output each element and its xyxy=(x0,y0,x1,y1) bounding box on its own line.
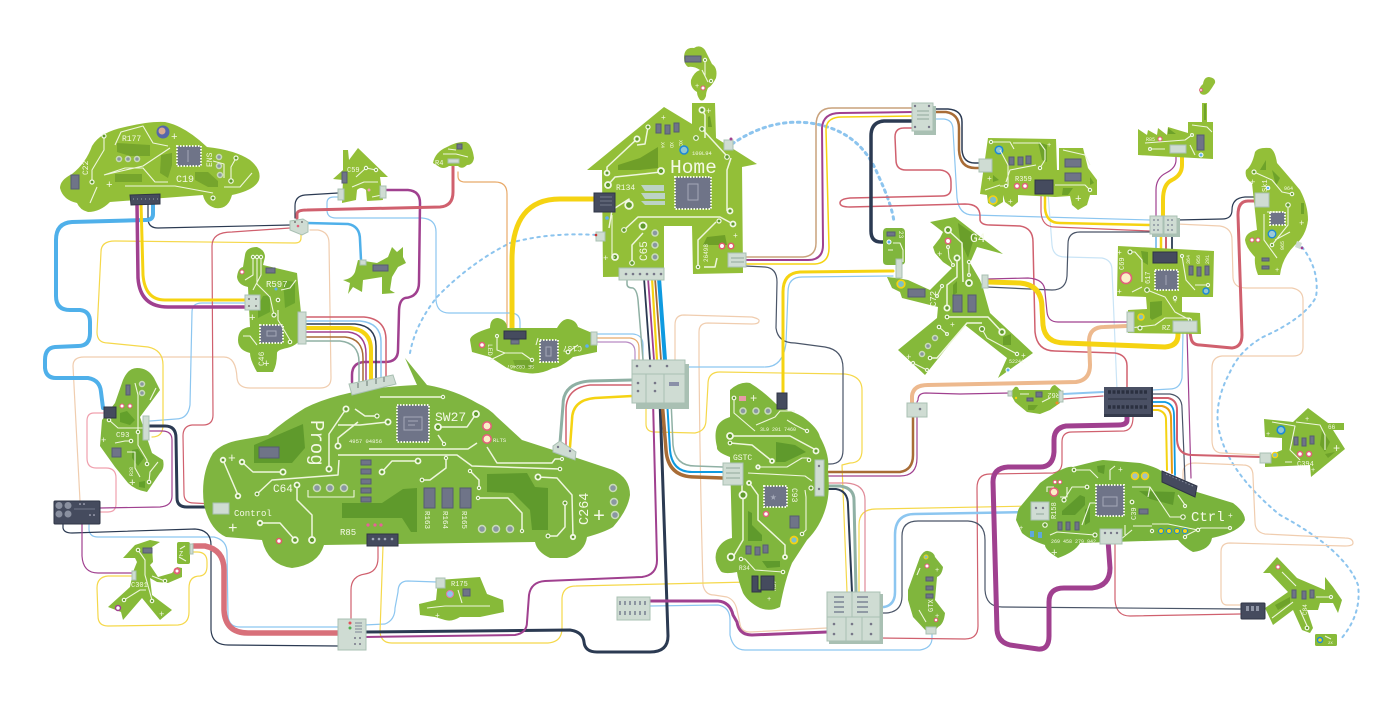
board: big car Prog: R164 xyxy=(440,511,448,530)
board: big car Prog: Control xyxy=(234,509,272,519)
board: walking man C301: + xyxy=(159,610,164,620)
board: walking man G4: 52241 xyxy=(1009,359,1024,365)
board: GSTC blob C93 xyxy=(716,383,829,610)
board: arrow C394: + xyxy=(1305,416,1309,424)
board: small car R175: R175 xyxy=(451,581,468,589)
board: R62 xyxy=(1010,385,1063,414)
board: small Z tag: Z xyxy=(179,551,183,559)
board: car C19: ENS xyxy=(206,152,215,167)
board: truck R359: + xyxy=(1075,194,1082,206)
board: car C19: R177 xyxy=(122,135,141,144)
connector: hub near C59 xyxy=(290,219,308,235)
board: house Home: + xyxy=(706,107,711,117)
board: car C19: + xyxy=(106,180,113,192)
board: GSTC blob C93: GSTC xyxy=(733,454,752,463)
board: house Home: XD xyxy=(668,142,674,148)
board: house Home: Home xyxy=(670,157,717,179)
connector: small right of Prog xyxy=(553,441,576,460)
smoke board: + xyxy=(695,83,699,91)
connector: top of big car xyxy=(349,375,396,395)
board: GSTC blob C93: + xyxy=(767,596,771,604)
hub module: bottom centre xyxy=(827,592,883,644)
board: plane man C84: C84 xyxy=(1302,604,1309,615)
board: C93 xyxy=(100,368,164,492)
board: factory xyxy=(1138,103,1213,159)
board: truck R359: + xyxy=(987,175,992,184)
board: walking man G4: + xyxy=(906,353,911,363)
hub module: lower left xyxy=(338,619,366,650)
board: house Home: + xyxy=(661,114,666,123)
board: LED car xyxy=(470,318,597,373)
board: GSTC blob C93: R34 xyxy=(739,565,750,572)
board: RZ module: 291 xyxy=(1205,255,1211,264)
board: big car Prog: SW27 xyxy=(435,410,466,425)
board: car C19: C19 xyxy=(176,175,194,186)
board: big car Prog: RLTS xyxy=(493,437,507,444)
board: car Sk1: + xyxy=(1275,267,1279,275)
board: arrow C394: + xyxy=(1311,467,1315,475)
board: car C19: + xyxy=(171,132,178,144)
board: big car Prog: R163 xyxy=(422,511,430,530)
board: RZ module xyxy=(1117,246,1214,334)
board: house Home: R134 xyxy=(616,184,635,193)
board: RZ module: 364 xyxy=(1186,255,1192,264)
dotted wireless links xyxy=(410,122,1359,640)
board: Ctrl car: + xyxy=(1228,512,1233,521)
hub module: centre xyxy=(632,360,689,409)
board: Ctrl car: + xyxy=(1118,466,1123,475)
board: house Home: + xyxy=(733,232,738,241)
board: C93: + xyxy=(129,478,136,490)
board: big car Prog: + xyxy=(228,520,238,538)
board: small Z tag xyxy=(177,542,190,564)
board: small module 23 xyxy=(883,228,905,265)
board: car Sk1: + xyxy=(1250,178,1255,188)
controller box: lower left xyxy=(54,501,100,524)
connector module: top 912 xyxy=(912,103,936,135)
board: GSTC blob C93: + xyxy=(750,392,757,406)
board: small module 23: 23 xyxy=(897,231,904,239)
board: plane man C84 xyxy=(1263,557,1342,633)
board: R597 xyxy=(237,247,303,372)
board: big car Prog: C64 xyxy=(273,484,293,496)
board: GTX car: GTX xyxy=(928,599,936,612)
board: arrow C394: + xyxy=(1266,431,1270,439)
board: GTX car xyxy=(908,551,945,633)
board: walking man G4: C72 xyxy=(929,291,939,307)
board: C93: + xyxy=(101,436,106,446)
board: big car Prog: + xyxy=(593,506,605,529)
board: house Home: X4 xyxy=(659,142,665,148)
board: walking man G4: + xyxy=(937,250,942,260)
board: house Home: XC xyxy=(677,140,683,146)
board: arrow C394 xyxy=(1264,408,1345,477)
board: GSTC blob C93: R37 xyxy=(771,580,778,591)
board: big car Prog: C264 xyxy=(578,493,593,525)
board: small house C59 xyxy=(333,148,388,203)
board: C93: R28 xyxy=(129,467,135,476)
board: truck R359: + xyxy=(1047,142,1051,150)
board: big car Prog xyxy=(203,358,630,568)
board: RZ module: + xyxy=(1173,298,1177,306)
board: small car R4: R4 xyxy=(435,160,443,168)
board: small tag xyxy=(1315,634,1337,646)
board: small house C59: C59 xyxy=(347,167,360,175)
board: small car R175: + xyxy=(435,612,440,621)
board: car Sk1: 965 xyxy=(1280,241,1286,250)
board: truck R359: + xyxy=(1008,198,1013,207)
board: car C19 xyxy=(60,122,260,212)
board: GTX car: + xyxy=(935,613,939,621)
board: car Sk1: 964 xyxy=(1284,186,1293,192)
board: arrow C394: C394 xyxy=(1297,461,1314,469)
board: LED car: C137 xyxy=(563,343,582,352)
board: Ctrl car: R158 xyxy=(1051,502,1059,519)
board: Ctrl car: + xyxy=(1019,525,1023,533)
board: RZ module: 956 xyxy=(1196,255,1202,264)
board: R597: R597 xyxy=(266,280,288,290)
board: factory: R85 xyxy=(1146,137,1155,143)
board: Ctrl car: C39 xyxy=(1131,507,1139,520)
board: truck R359 xyxy=(980,138,1097,210)
board: big car Prog: R85 xyxy=(340,528,356,538)
board: car Sk1: + xyxy=(1299,219,1304,229)
board: walking man G4: G4 xyxy=(970,231,986,246)
board: big car Prog: R165 xyxy=(459,511,467,530)
board: house Home: 100L94 xyxy=(692,150,713,157)
board: R597: + xyxy=(249,313,256,325)
board: walking man C301 xyxy=(108,540,182,620)
smoke: factory xyxy=(1199,77,1215,95)
board: Ctrl car: Ctrl xyxy=(1191,510,1225,526)
board: car Sk1 xyxy=(1245,148,1308,275)
board: small car R4 xyxy=(433,142,474,168)
board: walking man G4: + xyxy=(950,321,955,330)
board: truck R359: R359 xyxy=(1015,176,1032,184)
board: R597: C46 xyxy=(258,351,267,366)
board: arrow C394: 66 xyxy=(1328,424,1336,431)
dark connectors xyxy=(104,180,1197,592)
board: big car Prog: 4957 04856 xyxy=(349,438,382,445)
board: C93: C93 xyxy=(116,432,130,440)
board: RZ module: 617 xyxy=(1145,271,1153,284)
medium and thick coloured wires xyxy=(45,108,1260,652)
board: house Home: + xyxy=(603,254,608,264)
board: LED car: LED xyxy=(486,344,493,356)
board: RZ module: RZ xyxy=(1162,325,1170,333)
board: small car R175 xyxy=(419,577,504,621)
connectors: small light connectors xyxy=(132,138,1303,634)
thin background wires xyxy=(63,119,1353,650)
board: LED car: SE C02467 xyxy=(507,363,534,369)
smoke board xyxy=(684,46,716,100)
board: house Home xyxy=(587,103,757,277)
board: R62: R62 xyxy=(1047,390,1060,398)
board: Ctrl car: 269 458 279 942 xyxy=(1051,539,1096,545)
board: GSTC blob C93: ★ xyxy=(770,492,777,504)
board: walking man G4: + xyxy=(1021,352,1026,361)
connector module: 617 xyxy=(617,597,650,620)
board: car C19: C22 xyxy=(82,160,91,175)
board: big car Prog: Prog xyxy=(305,420,327,466)
board: house Home: 26498 xyxy=(703,244,710,262)
controller box: black 1104 xyxy=(1104,387,1153,417)
board: RZ module: + xyxy=(1117,249,1122,258)
hub module: right 1150 xyxy=(1150,216,1180,237)
controller box: plane 1241 xyxy=(1241,603,1265,619)
board: big car Prog: + xyxy=(228,451,236,466)
board: GTX car: + xyxy=(935,567,939,575)
board: R597: + xyxy=(263,359,270,371)
board: small tag: 2X xyxy=(1328,642,1333,646)
board: GSTC blob C93: 3L9 201 7460 xyxy=(760,427,796,433)
board: walking man G4 xyxy=(887,217,1033,378)
board: Ctrl car: + xyxy=(1051,548,1058,560)
board: walking man C301: C301 xyxy=(131,582,148,590)
board: Ctrl car xyxy=(1016,460,1245,560)
board: RZ module: + xyxy=(1117,288,1122,297)
board: GSTC blob C93: C93 xyxy=(789,488,798,503)
board: car Sk1: Sk1 xyxy=(1262,179,1270,192)
board: house Home: C65 xyxy=(639,241,651,261)
board: RZ module: C69 xyxy=(1119,257,1127,270)
board: arrow C394: + xyxy=(1333,442,1340,456)
board: dog xyxy=(343,247,406,294)
